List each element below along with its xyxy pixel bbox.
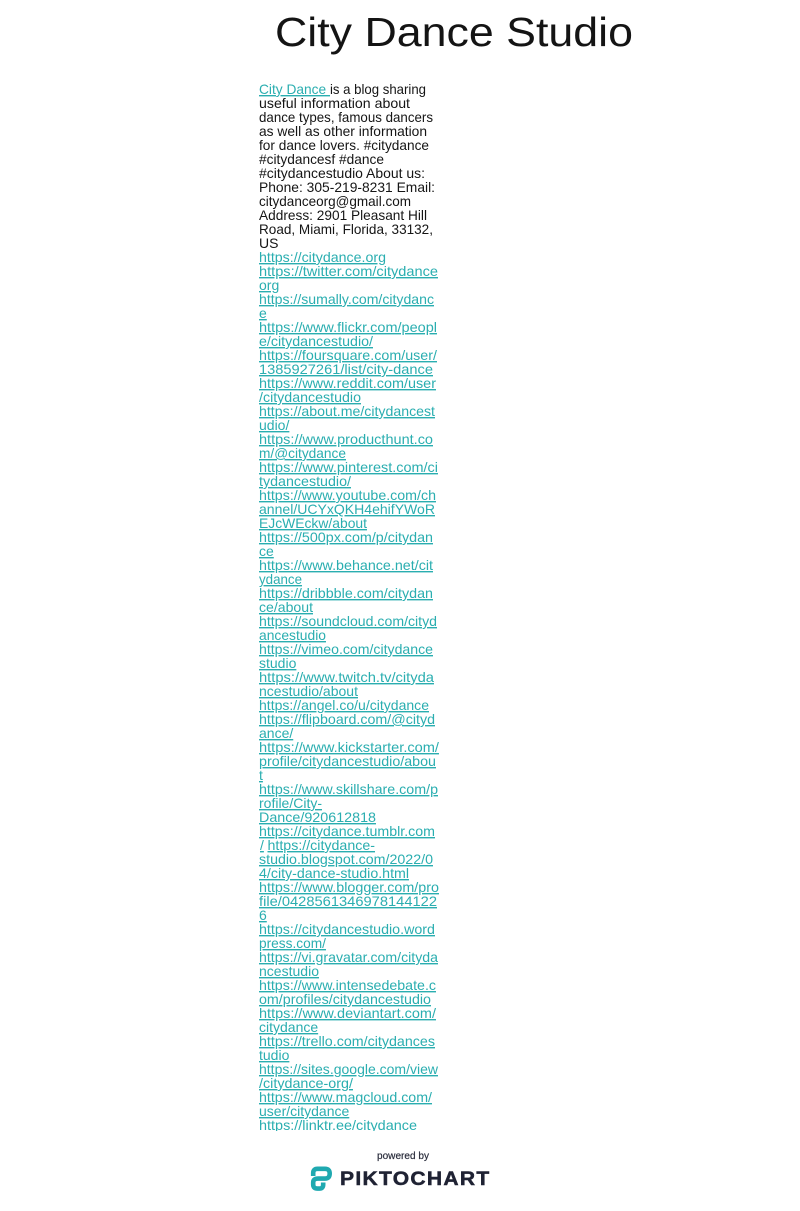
intro text block: Phone: 305-219-8231 Email: [259,179,435,195]
link list: Dance/920612818 [259,809,376,825]
link list: https://www.magcloud.com/ [259,1089,432,1105]
link list: org [259,277,279,293]
link list: https://www.youtube.com/ch [259,487,436,503]
link list [259,249,439,1133]
link list: citydance [259,1019,318,1035]
link list: 1385927261/list/city-dance [259,361,433,377]
link list: https://citydance.tumblr.com [259,823,435,839]
link list: m/@citydance [259,445,346,461]
intro text block: is a blog sharing [330,81,426,97]
link list: https://trello.com/citydances [259,1033,435,1049]
link list: 4/city-dance-studio.html [259,865,409,881]
intro text block: US [259,235,278,251]
link list: https://www.skillshare.com/p [259,781,438,797]
link list: om/profiles/citydancestudio [259,991,431,1007]
link list: EJcWEckw/about [259,515,367,531]
link list: https://www.behance.net/cit [259,557,433,573]
link list: https://twitter.com/citydance [259,263,438,279]
intro text block: Address: 2901 Pleasant Hill [259,207,427,223]
link list: https://www.blogger.com/pro [259,879,439,895]
link list: tudio [259,1047,290,1063]
link list: file/0428561346978144122 [259,893,437,909]
link list: https://soundcloud.com/cityd [259,613,437,629]
footer: powered by Piktochart [310,1151,491,1191]
link list: press.com/ [259,935,326,951]
link list: https://flipboard.com/@cityd [259,711,435,727]
link list: ce [259,543,274,559]
link list: ce/about [259,599,313,615]
link list: profile/citydancestudio/abou [259,753,436,769]
link list: studio.blogspot.com/2022/0 [259,851,433,867]
link list: https://sites.google.com/view [259,1061,439,1077]
link list: ancestudio [259,627,326,643]
link list: https://citydance.org [259,249,386,265]
link list: https://angel.co/u/citydance [259,697,429,713]
link list: udio/ [259,417,289,433]
intro text block: #citydancestudio About us: [259,165,425,181]
intro text block: citydanceorg@gmail.com [259,193,411,209]
panel: text column [259,81,439,1131]
link list: tydancestudio/ [259,473,351,489]
intro text block: for dance lovers. #citydance [259,137,429,153]
link list: annel/UCYxQKH4ehifYWoR [259,501,435,517]
intro text block: City Dance [259,81,330,97]
link list: https://about.me/citydancest [259,403,435,419]
link list: 6 [259,907,267,923]
link list: https://www.deviantart.com/ [259,1005,436,1021]
intro text block: useful information about [259,95,410,111]
link list: https://www.pinterest.com/ci [259,459,438,475]
link list: https://vimeo.com/citydance [259,641,433,657]
link list: https://www.kickstarter.com/ [259,739,439,755]
link list: /citydancestudio [259,389,361,405]
link list: t [259,767,263,783]
link list: https://www.producthunt.co [259,431,433,447]
icon: Piktochart logo [313,1169,330,1189]
link list: https://foursquare.com/user/ [259,347,437,363]
link list: rofile/City- [259,795,322,811]
link list: user/citydance [259,1103,349,1119]
link list: /citydance-org/ [259,1075,353,1091]
intro text block [259,81,435,251]
link list: e [259,305,267,321]
powered by text: powered by [377,1151,429,1162]
link list: ydance [259,571,302,587]
link list: https://citydance- [268,837,375,853]
link list: https://vi.gravatar.com/cityda [259,949,438,965]
link list: / [260,837,264,853]
intro text block: as well as other information [259,123,427,139]
link list: https://sumally.com/citydanc [259,291,434,307]
intro text block: dance types, famous dancers [259,109,433,125]
link list: https://www.reddit.com/user [259,375,436,391]
link list: studio [259,655,297,671]
link list: https://www.intensedebate.c [259,977,436,993]
intro text block: #citydancesf #dance [259,151,384,167]
title: City Dance Studio [275,9,633,55]
link list: ncestudio [259,963,319,979]
link list: ance/ [259,725,293,741]
intro text block: Road, Miami, Florida, 33132, [259,221,433,237]
link list: https://citydancestudio.word [259,921,435,937]
link list: https://www.flickr.com/peopl [259,319,437,335]
link list: https://www.twitch.tv/cityda [259,669,434,685]
link list: e/citydancestudio/ [259,333,373,349]
link list: ncestudio/about [259,683,358,699]
link list: https://500px.com/p/citydan [259,529,433,545]
link list: https://dribbble.com/citydan [259,585,433,601]
wordmark: PIKTOCHART [340,1169,491,1190]
